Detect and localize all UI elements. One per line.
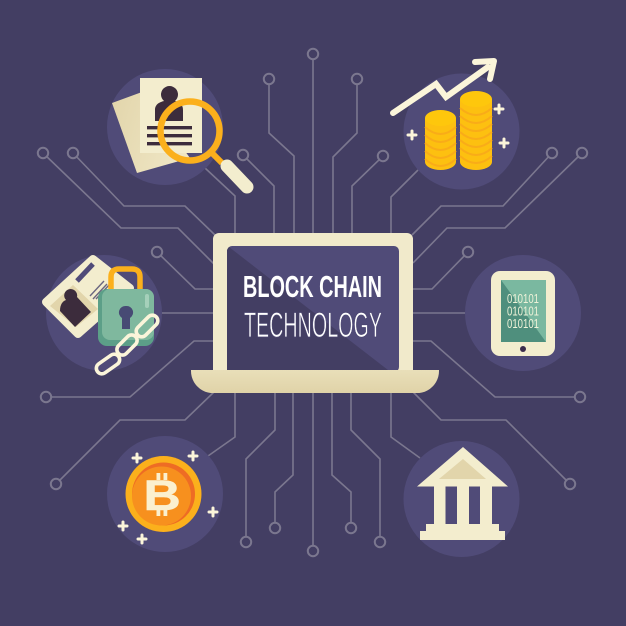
padlock face — [102, 289, 154, 340]
magnifier — [160, 102, 247, 187]
icon: tablet with binary data — [465, 255, 581, 371]
circle backdrop — [404, 441, 520, 557]
tablet body — [491, 271, 555, 356]
binary text: 010101 — [507, 304, 539, 318]
ID photo — [50, 285, 98, 327]
icon: bank building — [404, 441, 520, 557]
padlock body — [98, 289, 154, 346]
person silhouette — [155, 86, 183, 121]
growth arrow — [393, 67, 488, 113]
short coin stack — [425, 110, 456, 170]
icon: coins and growth arrow — [393, 61, 520, 190]
bitcoin symbol: B — [144, 472, 181, 520]
pediment — [439, 459, 486, 479]
title line two: TECHNOLOGY — [244, 306, 382, 345]
chain — [94, 313, 160, 376]
ID card — [46, 259, 130, 334]
roof — [417, 447, 508, 486]
padlock highlight — [145, 294, 149, 308]
icon: identity document under magnifier — [107, 69, 247, 187]
binary text — [507, 292, 539, 331]
binary text: 010101 — [507, 292, 539, 306]
circle backdrop — [465, 255, 581, 371]
ID name bar — [77, 264, 93, 281]
icon: ID card with padlock and chain — [46, 255, 162, 376]
circle backdrop — [404, 74, 520, 190]
ID person silhouette — [60, 289, 91, 327]
circle backdrop — [107, 436, 223, 552]
text lines — [147, 126, 192, 145]
screen shade — [501, 280, 546, 342]
tablet screen — [501, 280, 546, 342]
home button — [520, 346, 526, 352]
coin crescent — [132, 462, 195, 526]
screen diagonal shade — [227, 247, 388, 370]
laptop lid — [213, 233, 413, 378]
padlock shackle — [111, 269, 140, 292]
laptop screen — [227, 246, 399, 372]
sparkles — [119, 452, 217, 543]
keyhole — [119, 306, 133, 329]
coin rim — [126, 456, 202, 532]
binary text: 010101 — [507, 317, 539, 331]
icon: bitcoin — [107, 436, 223, 552]
circuit lines — [43, 54, 582, 551]
columns — [434, 486, 492, 525]
steps — [420, 524, 505, 540]
circuit nodes — [38, 49, 587, 556]
sparkles — [408, 105, 508, 147]
ID barcode — [90, 281, 112, 299]
circle backdrop — [107, 69, 223, 185]
front paper — [140, 78, 202, 153]
circle backdrop — [46, 255, 162, 371]
title line one: BLOCK CHAIN — [243, 270, 382, 304]
back paper — [112, 92, 190, 173]
tall coin stack — [460, 91, 492, 170]
laptop — [191, 233, 439, 393]
arrow head — [475, 61, 494, 79]
laptop base — [191, 370, 439, 393]
coin face — [132, 466, 191, 526]
